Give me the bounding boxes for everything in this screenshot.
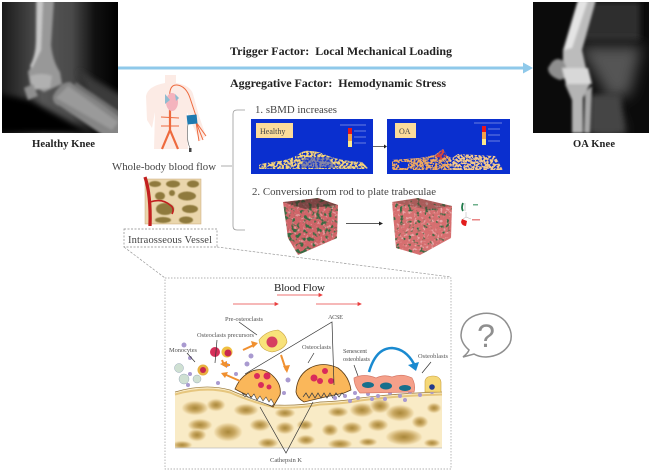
label: healthy knee: Healthy Knee <box>32 138 95 150</box>
cell labels: Pre-osteoclasts <box>225 316 264 323</box>
icon: human body with blood vessels and cuff <box>146 75 206 152</box>
heading: trigger factor: Trigger Factor: Local Mechanical Loading <box>230 44 452 58</box>
blood flow arrows <box>233 294 361 306</box>
panel: bone remodeling detail: ACSE <box>328 314 343 321</box>
panel: OA sBMD <box>387 119 510 174</box>
label box: intraosseous vessel <box>124 229 217 247</box>
panel: bone remodeling detail: Osteoclasts precursors <box>197 332 254 339</box>
panel: healthy sBMD <box>251 119 373 174</box>
cell annotation lines <box>187 322 431 453</box>
trabecular cube: before <box>283 198 338 255</box>
trabecular cube: after <box>392 198 452 255</box>
panel: healthy sBMD: Healthy <box>260 127 285 136</box>
main trigger arrow <box>118 62 533 74</box>
monocytes <box>174 364 201 384</box>
heading: rod to plate conversion: 2. Conversion from rod to plate trabeculae <box>252 186 436 198</box>
small purple cells <box>182 342 434 403</box>
connector line <box>221 165 232 167</box>
panel: bone remodeling detail: Cathepsin K <box>270 457 302 464</box>
arrow between cubes <box>346 222 383 226</box>
OA knee x-ray <box>533 0 649 133</box>
orange migration arrows <box>222 344 286 381</box>
label: OA knee: OA Knee <box>573 139 615 150</box>
panel: bone remodeling detail: Osteoblasts <box>418 353 448 360</box>
blue curved arrow <box>369 348 419 372</box>
osteoblast <box>425 376 441 392</box>
osteoclast left <box>235 370 280 407</box>
senescent osteoblasts <box>354 375 415 393</box>
panel: bone remodeling detail: Osteoclasts <box>302 344 332 351</box>
panel: bone remodeling detail <box>165 278 451 469</box>
pre-osteoclast <box>259 330 287 352</box>
label: whole-body blood flow: Whole-body blood flow <box>112 161 216 173</box>
speech bubble with question mark <box>461 313 511 357</box>
label box: intraosseous vessel: Intraosseous Vessel <box>128 235 212 246</box>
heading: blood flow: Blood Flow <box>274 282 325 294</box>
bone tissue <box>172 387 442 449</box>
healthy knee x-ray <box>2 2 118 133</box>
panel: OA sBMD: OA <box>399 127 411 136</box>
icon: intraosseous vessel <box>145 177 201 226</box>
panel: bone remodeling detail: Monocytes <box>169 347 198 354</box>
arrow between sBMD panels <box>373 144 387 148</box>
heading: sBMD increases: 1. sBMD increases <box>255 104 337 116</box>
legend: rod and plate <box>461 203 480 226</box>
speech bubble with question mark: ? <box>477 318 495 354</box>
panel: bone remodeling detail: Senescent <box>343 348 367 355</box>
osteoclast right <box>296 364 351 402</box>
dashed zoom lines <box>124 247 451 278</box>
osteoclast precursors <box>198 346 232 376</box>
bracket <box>233 110 245 230</box>
panel: bone remodeling detail: osteoblasts <box>343 356 370 363</box>
heading: aggregative factor: Aggregative Factor: Hemodynamic Stress <box>230 76 446 90</box>
